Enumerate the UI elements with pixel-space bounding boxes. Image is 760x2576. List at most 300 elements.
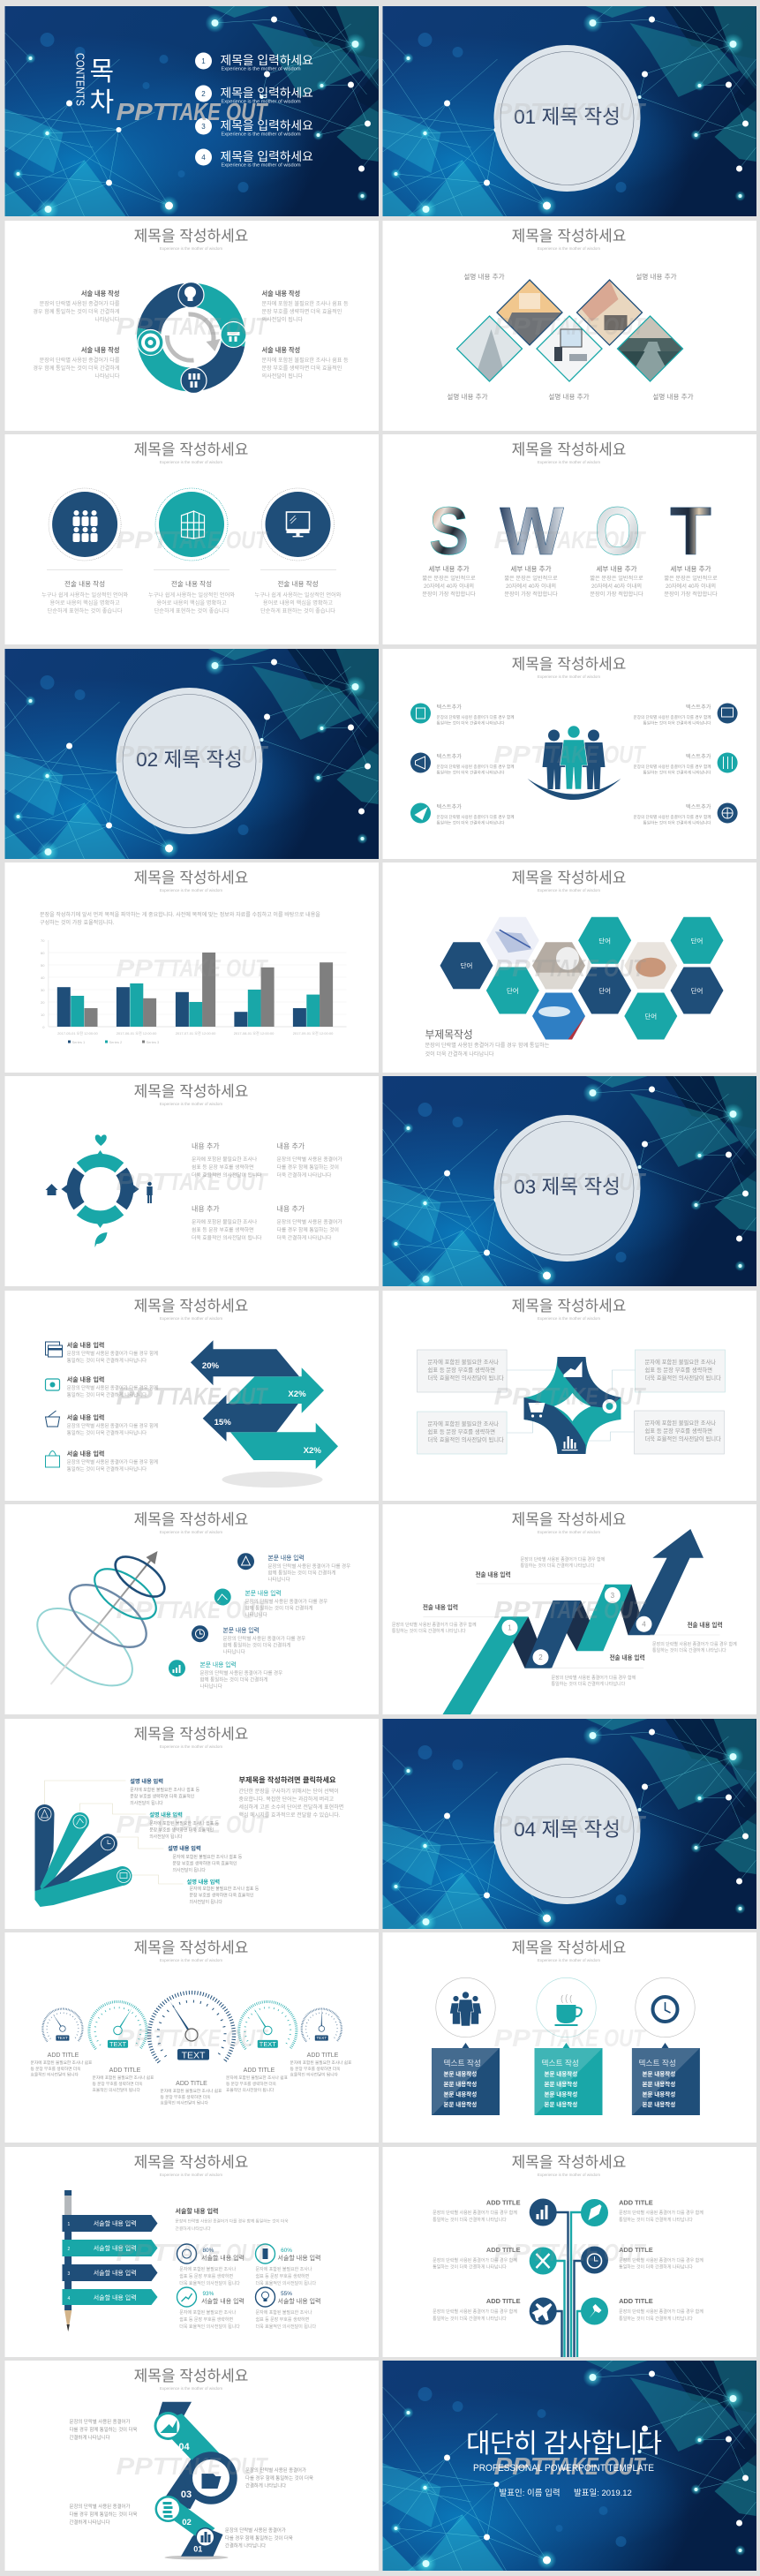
text: left top [33,290,120,323]
legend: Series 2 [109,1040,123,1044]
text box: top right: 더욱 효율적인 의사전달이 됩니다 [644,1374,721,1382]
text: right bottom: 문장 부호를 생략하면 더욱 효율적인 [261,365,342,372]
watermark [117,1382,269,1410]
arrow labels: X2% [288,1390,306,1399]
text column 2 [148,579,235,614]
right text 2 [619,2246,704,2271]
list item 4: 서술 내용 입력 [67,1450,104,1457]
title: 제목을 작성하세요 [512,1940,626,1956]
title: 제목을 작성하세요 [134,1940,248,1956]
text: right top: 의사전달이 됩니다 [261,316,303,323]
gauge: mid right: TEXT [260,2040,276,2048]
right item 1: 문장의 단락별 사용된 종결어가 다를 경우 함께 [634,714,711,720]
left item 3: 통일하는 것이 더욱 간결하게 나타납니다 [436,819,505,826]
subtitle: Experience is the mother of wisdom [160,888,222,893]
text: right top: 문장 부호를 생략하면 더욱 효율적인 [261,308,342,315]
gauge caption 3: 등 문장 부호를 생략하면 더욱 [161,2094,211,2100]
hexagon: photo sky [532,992,585,1040]
watermark: TAKE OUT [169,526,269,554]
right item 3: 통일하는 것이 더욱 간결하게 나타납니다 [643,819,711,826]
stat 55%: 더욱 효율적인 의사전달이 됩니다 [256,2324,316,2330]
item 2: 2 [201,90,206,98]
gauge: small left: TEXT [57,2036,68,2040]
watermark: TAKE OUT [169,741,269,768]
right item 3 [634,803,738,826]
hexagon: teal: 단어 [644,1012,657,1021]
subtitle: Experience is the mother of wisdom [538,1530,600,1534]
hexagon: teal: 단어 [598,936,611,945]
panel [5,2361,379,2571]
text column 2: 용어로 내용의 핵심을 명확하고 [156,599,227,606]
watermark: TAKE OUT [169,954,269,982]
hexagon: photo hands [624,942,677,990]
right text 3: 문장의 단락별 사용된 종결어가 다를 경우 함께 [619,2309,704,2315]
text: step 3: 간결하게 나타납니다 [245,2482,286,2489]
SWOT column 3: 문장이 가장 적합합니다 [590,591,643,598]
subtitle: Experience is the mother of wisdom [160,1316,222,1321]
list item 1: 문장의 단락별 사용된 종결어가 다를 경우 함께 [67,1350,158,1357]
callout 2 [392,1603,477,1634]
panel [5,862,379,1073]
stat 93%: 문자에 포함된 불필요한 조사나 [179,2309,237,2316]
team figures [528,726,621,800]
item 1: 나타납니다 [268,1576,290,1583]
diamond photo: railway [618,316,683,381]
panel [5,221,379,431]
left item 1: 텍스트추가 [436,704,462,711]
label 1: 설명 내용 입력 [130,1778,163,1785]
block 3: 더욱 효율적인 의사전달이 됩니다 [192,1234,262,1241]
text box: bottom right: 문자에 포함된 불필요한 조사나 [644,1419,716,1427]
block 3: 쉼표 등 문장 부호를 생략하면 [192,1226,253,1233]
SWOT column 1: 20자에서 40자 이내의 [424,583,474,590]
text column 3: 용어로 내용의 핵심을 명확하고 [263,599,333,606]
watermark: TAKE OUT [547,526,647,554]
watermark: PPT [117,2024,172,2052]
item 3: Experience is the mother of wisdom [221,132,301,138]
gauge caption 5: 효율적인 의사전달이 됩니다 [290,2071,339,2078]
label 1 [130,1778,200,1806]
stat 55%: 문자에 포함된 불필요한 조사나 [256,2309,312,2316]
subtitle: Experience is the mother of wisdom [160,460,222,464]
watermark: PPT [117,2452,172,2480]
watermark: PPT [494,2024,550,2052]
text: left bottom [33,346,120,380]
title: 제목을 작성하세요 [512,2154,626,2171]
slide: team [383,649,756,859]
item 2 [195,85,313,104]
callout 4 [551,1653,645,1687]
block 1: 쉼표 등 문장 부호를 생략하면 [192,1164,253,1171]
block 2: 다를 경우 함께 통일하는 것이 [277,1164,339,1171]
text: step 2 [69,2503,137,2526]
title: 제목을 작성하세요 [134,870,248,886]
slide: section 03 [383,1076,756,1290]
list item 4: 통일하는 것이 더욱 간결하게 나타납니다 [67,1465,147,1473]
stat 93% [177,2287,245,2330]
watermark: TAKE OUT [547,2452,647,2480]
text: right bottom: 문자에 포함된 불필요한 조사나 쉼표 등 [261,357,349,364]
callout 4: 문장의 단락별 사용된 종결어가 다를 경우 함께 [551,1675,636,1681]
left item 2: 문장의 단락별 사용된 종결어가 다를 경우 함께 [436,764,514,770]
SWOT letters: O [595,493,641,569]
SWOT column 1 [422,565,476,598]
right item 3: 텍스트추가 [686,803,711,810]
right item 2: 문장의 단락별 사용된 종결어가 다를 경우 함께 [634,764,711,770]
SWOT letters: T [670,493,711,569]
watermark [117,1168,269,1195]
capsule 4: teal [35,1866,132,1907]
panel [383,862,756,1073]
hexagon: navy: 단어 [461,961,472,970]
text box: bottom right: 쉼표 등 문장 부호를 생략하면 [644,1427,712,1435]
left text 3: 통일하는 것이 더욱 간결하게 나타납니다 [433,2316,507,2322]
side paragraph: 세심하게 고른 소수의 단어로 전달하게 표현하면 [238,1804,343,1811]
right text 2: 문장의 단락별 사용된 종결어가 다를 경우 함께 [619,2257,704,2263]
panel [383,1932,756,2143]
label 1: 문장 부호를 생략하면 더욱 효율적인 [130,1794,194,1799]
left text 1 [433,2199,521,2223]
slide: section 04 [383,1719,756,1932]
hexagon: photo pens [486,916,539,964]
watermark: PPT [494,1811,550,1838]
panel [5,434,379,644]
body text: 것이 더욱 간결하게 나타납니다 [425,1051,494,1058]
SWOT column 1: 세부 내용 추가 [428,565,470,573]
text: step 1: 간결하게 나타납니다 [225,2542,266,2550]
card 1: 본문 내용작성 [443,2090,477,2098]
diamond photo: desk [577,280,643,345]
text: step 3: 문장의 단락별 사용된 종결어가 [245,2467,306,2474]
gauge: mid right [239,2001,297,2049]
item 3 [192,1625,305,1655]
SWOT column 2: 문장이 가장 적합합니다 [504,591,558,598]
watermark [117,313,269,340]
ribbon 4 [62,2289,157,2305]
label 2: 설명 내용 입력 [149,1811,183,1819]
title: 제목을 작성하세요 [512,656,626,673]
block 2: 내용 추가 [277,1142,305,1150]
left text 1: ADD TITLE [486,2199,521,2207]
gauge caption 1: 문자에 포함된 불필요한 조사나 쉼표 [30,2060,93,2066]
slide: gauges [5,1932,379,2143]
text: right bottom: 의사전달이 됩니다 [261,373,303,380]
text column 3 [255,579,342,614]
SWOT letters: W [500,493,564,569]
background: network [383,2361,756,2574]
side heading: 부제목을 작성하려면 클릭하세요 [238,1775,336,1784]
SWOT column 3: 짧은 문장은 일반적으로 [590,575,643,582]
watermark: TAKE OUT [169,1168,269,1195]
panel [5,1719,379,1929]
series 3 bars [85,953,333,1027]
watermark: TAKE OUT [547,2024,647,2052]
label 4: 문장 부호를 생략하면 더욱 효율적인 [189,1893,253,1898]
subtitle: Experience is the mother of wisdom [538,246,600,251]
ground shadow [222,1472,323,1488]
list item 3: 문장의 단락별 사용된 종결어가 다를 경우 함께 [67,1422,158,1429]
gauge caption 5: ADD TITLE [307,2053,339,2059]
stat 80%: 문자에 포함된 불필요한 조사나 [179,2266,237,2272]
closing title: 대단히 감사합니다 [466,2429,662,2459]
icon: monitor [286,512,309,537]
right item 2: 통일하는 것이 더욱 간결하게 나타납니다 [643,770,711,775]
item 3: 함께 통일하는 것이 더욱 간결하게 [222,1642,290,1649]
left text 2: 통일하는 것이 더욱 간결하게 나타납니다 [433,2263,507,2271]
icon: target [138,330,163,355]
diamond labels: 설명 내용 추가 [652,392,694,401]
hexagon: teal: 단어 [691,936,703,945]
arrow 2: teal [228,1367,324,1413]
ribbon arrow: 2 [538,1653,543,1661]
arrow stack [191,1340,338,1469]
SWOT column 3 [590,565,643,598]
ribbon arrow: 1 [508,1624,512,1631]
stat 80%: 서술할 내용 입력 [201,2254,245,2262]
hexagon: teal [671,917,724,964]
stat 80%: 80% [203,2248,214,2254]
slide: three circles [5,434,379,644]
SWOT column 4: 세부 내용 추가 [670,565,711,573]
list item 3 [46,1411,158,1436]
category labels: 2017-06-01 오전 12:00:00 [117,1030,157,1036]
title: 제목을 작성하세요 [134,2368,248,2384]
text box: bottom right [634,1411,724,1454]
watermark [494,2452,647,2480]
gauge caption 4 [226,2068,289,2093]
gauge caption 3: 문자에 포함된 불필요한 조사나 쉼표 [161,2088,222,2094]
block 1: 내용 추가 [192,1142,220,1150]
watermark: TAKE OUT [169,1811,269,1838]
hexagon: navy [671,968,724,1013]
card 3: 본문 내용작성 [643,2069,675,2078]
ribbon diagram [154,2402,237,2557]
text: right bottom: 서술 내용 작성 [261,346,300,354]
text: step 1: 문장의 단락별 사용된 종결어가 [225,2527,286,2534]
right text 1 [619,2199,704,2223]
card 2: 본문 내용작성 [544,2069,577,2078]
watermark [494,98,647,125]
left text 2 [433,2246,521,2271]
slide: three cards [383,1932,756,2143]
panel [5,2147,379,2357]
series 2 bars [71,983,320,1027]
watermark: TAKE OUT [547,1596,647,1623]
node: pen [581,2199,608,2226]
text box: top left: 쉼표 등 문장 부호를 생략하면 [427,1366,495,1374]
ribbon 2 [62,2240,157,2256]
SWOT column 3: 20자에서 40자 이내의 [591,583,642,590]
text: left top: 나타납니다 [94,316,120,323]
watermark [494,1168,647,1195]
label 2: 의사전달이 됩니다 [149,1834,183,1840]
card 2: 본문 내용작성 [544,2090,577,2098]
slide: hexagons [383,862,756,1073]
left item 2 [410,752,514,775]
ribbon 1 [62,2215,157,2232]
callout 1: 전술 내용 입력 [475,1570,511,1578]
category labels: 2017-08-01 오전 12:00:00 [234,1030,275,1036]
card 3: 텍스트 작성 [639,2059,676,2068]
text: right top [261,290,349,323]
text: right top: 서술 내용 작성 [261,290,300,298]
watermark: PPT [117,741,172,768]
hexagon: teal [486,968,539,1013]
panel [383,434,756,644]
title: 제목을 작성하세요 [134,1511,248,1528]
diamond labels: 설명 내용 추가 [447,392,488,401]
background: network [383,1719,756,1932]
callout 1: 문장의 단락별 사용된 종결어가 다를 경우 함께 [521,1556,606,1563]
item 4: 본문 내용 입력 [199,1661,237,1668]
text: step 2: 다를 경우 함께 통일하는 것이 더욱 [69,2511,137,2518]
list item 2: 서술 내용 입력 [67,1375,104,1383]
item 4: 4 [201,154,206,162]
gauge caption 2: 문자에 포함된 불필요한 조사나 쉼표 [92,2075,154,2081]
heading: 목차: 목 [90,57,114,87]
stat 80%: 더욱 효율적인 의사전달이 됩니다 [179,2280,240,2286]
slide: diamond photos [383,221,756,431]
watermark: PPT [117,954,172,982]
callout 2: 문장의 단락별 사용된 종결어가 다를 경우 함께 [392,1622,477,1628]
list item 1 [46,1341,158,1364]
callout 4: 전술 내용 입력 [609,1653,645,1661]
node: alarm clock [581,2246,608,2274]
right text 3: ADD TITLE [619,2297,653,2305]
left item 3: 문장의 단락별 사용된 종결어가 다를 경우 함께 [436,814,514,820]
panel [383,649,756,859]
item 2: 문장의 단락별 사용된 종결어가 다를 경우 [245,1598,327,1605]
watermark [117,741,269,768]
SWOT column 2 [504,565,558,598]
item 1: Experience is the mother of wisdom [221,67,301,72]
item 3: 본문 내용 입력 [222,1626,260,1634]
right text 3 [619,2297,704,2322]
label 4 [187,1879,260,1905]
gauge: small right: TEXT [316,2036,327,2040]
body text [425,1042,550,1058]
subtitle: Experience is the mother of wisdom [160,1958,222,1962]
list item 2 [46,1375,158,1398]
legend: Series 3 [147,1040,160,1044]
hexagon: navy: 단어 [691,986,703,995]
hexagon grid [440,916,724,1040]
diamond labels: 설명 내용 추가 [463,272,505,281]
watermark [117,2452,269,2480]
watermark [494,1811,647,1838]
ribbon 4: 4 [67,2296,71,2301]
watermark [494,741,647,768]
diamond labels: 설명 내용 추가 [636,272,677,281]
category labels [57,1030,334,1036]
ribbon arrow: 3 [611,1592,615,1600]
callout 1 [475,1556,606,1578]
title: 제목을 작성하세요 [512,1511,626,1528]
subtitle: Experience is the mother of wisdom [160,1530,222,1534]
stat 60% [256,2244,320,2286]
callout 3 [652,1621,737,1653]
hexagon: navy [440,942,493,989]
callout 1: 통일하는 것이 더욱 간결하게 나타납니다 [521,1563,595,1569]
text column 3: 단순하게 표현하는 것이 좋습니다 [260,607,335,614]
gauge caption 3: ADD TITLE [176,2081,207,2087]
label 2: 문자에 포함된 불필요한 조사나 쉼표 등 [149,1820,219,1827]
circle 1: people [49,488,121,561]
gauge caption 2: ADD TITLE [109,2068,141,2074]
right item 1: 텍스트추가 [686,704,711,711]
watermark: TAKE OUT [547,741,647,768]
block 3: 문자에 포함된 불필요한 조사나 [192,1218,258,1225]
stat 55% [256,2287,320,2330]
text column 2: 전술 내용 작성 [171,579,212,588]
slide: four-way ring [5,1076,379,1286]
icon: cup [554,1994,582,2026]
gauge caption 2: 등 문장 부호를 생략하면 더욱 [92,2081,143,2087]
icon: rising chart [563,1361,583,1377]
watermark: TAKE OUT [547,2239,647,2266]
gauge caption 5 [290,2053,352,2078]
stat 93%: 쉼표 등 문장 부호를 생략하면 [179,2316,233,2323]
background: network [383,1076,756,1290]
watermark [117,1596,269,1623]
gauge caption 1: 등 문장 부호를 생략하면 더욱 [30,2066,81,2072]
tagline: PROFESSIONAL POWERPOINT TEMPLATE [473,2463,654,2474]
list item 4 [46,1450,158,1473]
item 4: 함께 통일하는 것이 더욱 간결하게 [199,1676,267,1683]
node 02 [155,2496,192,2527]
callout 2: 전술 내용 입력 [423,1603,458,1611]
ribbon 2: 2 [67,2247,71,2252]
category labels: 2017-07-01 오전 12:00:00 [176,1030,216,1036]
SWOT column 1: 문장이 가장 적합합니다 [422,591,476,598]
subtitle: Experience is the mother of wisdom [538,888,600,893]
stat 55%: 55% [281,2291,292,2297]
list item 1: 통일하는 것이 더욱 간결하게 나타납니다 [67,1357,147,1364]
stat 60%: 문자에 포함된 불필요한 조사나 [256,2266,312,2272]
item 3: 문장의 단락별 사용된 종결어가 다를 경우 [222,1635,305,1642]
left item 1: 통일하는 것이 더욱 간결하게 나타납니다 [436,720,505,726]
background: network [383,6,756,220]
node 04: 04 [178,2442,190,2452]
paragraph: 구성하는 것이 가장 효율적입니다. [40,919,115,926]
left text 3 [433,2297,521,2322]
title: 제목을 작성하세요 [134,1083,248,1100]
text: step 2: 문장의 단락별 사용된 종결어가 [69,2503,131,2510]
text: left top: 서술 내용 작성 [81,290,120,298]
legend: Series 1 [72,1040,86,1044]
item 4 [195,148,313,168]
icon: gear [602,1399,616,1413]
section title: 01 제목 작성 [514,106,621,128]
item 3 [195,118,313,138]
left item 3 [410,803,514,826]
ribbon 2: 서술할 내용 입력 [94,2244,137,2252]
left text 1: 통일하는 것이 더욱 간결하게 나타납니다 [433,2217,507,2223]
section circle [494,1115,641,1262]
block 4 [277,1205,342,1241]
callout 3: 통일하는 것이 더욱 간결하게 나타납니다 [652,1647,726,1653]
watermark [494,954,647,982]
text: right bottom [261,346,349,380]
title: 제목을 작성하세요 [512,1298,626,1314]
axis labels: 10 [41,1013,45,1017]
watermark [494,1382,647,1410]
label 4: 문자에 포함된 불필요한 조사나 쉼표 등 [189,1886,260,1892]
watermark [494,2239,647,2266]
diamond photo: building [457,316,523,381]
right item 2 [634,752,738,775]
hexagon: teal [578,917,631,964]
